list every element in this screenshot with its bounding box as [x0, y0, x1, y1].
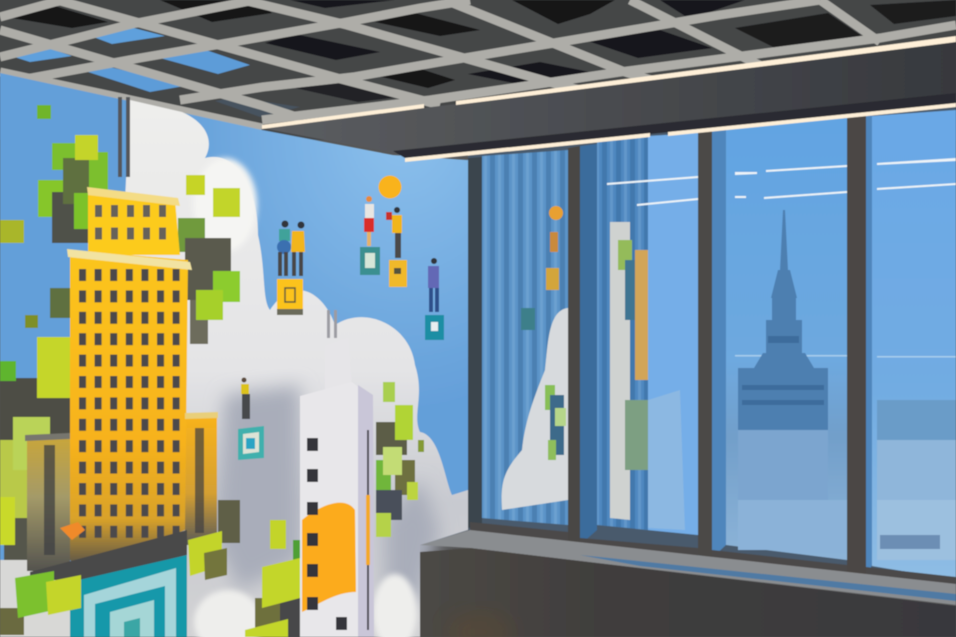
- window sill: [420, 530, 956, 605]
- floating teal square: [238, 426, 264, 460]
- mullion backing: [468, 100, 956, 600]
- lower white clouds: [194, 574, 417, 637]
- lower window frames: [470, 522, 956, 590]
- ceiling beams: [0, 0, 956, 128]
- window wall: [468, 100, 956, 600]
- white wash low left: [0, 560, 70, 637]
- dark counter block: [420, 548, 956, 637]
- right wing: [185, 415, 217, 545]
- man in suit: [428, 258, 439, 312]
- mural reflection 2: [610, 222, 630, 520]
- orange patch: [302, 503, 356, 612]
- grey cloud shading: [215, 385, 440, 610]
- Palace of Culture tower: [738, 210, 828, 430]
- couple figures: [277, 220, 305, 276]
- orange splash: [60, 522, 85, 540]
- ceiling soffit: [262, 40, 956, 153]
- yellow skyscraper: [25, 187, 218, 582]
- teal nested squares: [70, 555, 187, 637]
- tower body: [300, 382, 368, 637]
- faint cityscape: [648, 390, 685, 530]
- lavender side: [358, 385, 374, 637]
- pedestal: yellow large: [277, 279, 303, 315]
- counter warm reflection: [446, 610, 514, 637]
- pedestal: teal: [360, 247, 380, 275]
- pixel tiles near tower: [178, 175, 240, 344]
- tower spire: [327, 310, 330, 338]
- window pane 1: [482, 150, 568, 525]
- tower top: [325, 338, 352, 395]
- palace lower haze: [738, 430, 828, 500]
- cornices: [67, 249, 192, 270]
- painted clouds: [120, 100, 468, 637]
- bright cloud puff: [193, 158, 257, 252]
- floating figure: [241, 378, 250, 419]
- tower windows: [307, 438, 347, 630]
- hanging wall fixture: [118, 97, 130, 177]
- ceiling grid: [0, 0, 956, 140]
- side window slits: [367, 430, 369, 630]
- man with cup: [386, 207, 402, 258]
- white tower: [300, 310, 374, 637]
- flower: [378, 176, 402, 198]
- window pane 2: [597, 133, 698, 535]
- pixel tiles lower center: [245, 520, 302, 637]
- palace windows: [742, 336, 824, 405]
- sill blue reflection: [580, 555, 956, 601]
- reaching woman: [364, 196, 374, 246]
- louvre strip: [393, 93, 956, 158]
- main tower: [70, 250, 188, 570]
- mural reflection 1: [502, 308, 568, 510]
- left wing: [27, 436, 70, 571]
- left mural wall: [0, 73, 468, 637]
- figures and pedestals: [238, 176, 444, 460]
- pedestal: blue teal: [425, 315, 444, 340]
- dark base: [30, 530, 187, 582]
- pedestal: yellow small: [389, 260, 407, 287]
- horizon line: [735, 355, 847, 356]
- pixel tiles right cluster: [376, 382, 424, 537]
- mullions: [468, 115, 872, 578]
- ceiling openings: [8, 0, 956, 117]
- ceiling light strips: [262, 36, 956, 162]
- window pane 4: [872, 110, 956, 580]
- pixel tiles foreground: [15, 500, 240, 618]
- window pane 3: [726, 118, 847, 560]
- pixel tiles left cluster: [0, 105, 108, 635]
- upper tower: [88, 188, 180, 255]
- reflected ceiling lights: [607, 176, 698, 185]
- lighter glass pane: [648, 133, 698, 535]
- window grids: [79, 269, 185, 539]
